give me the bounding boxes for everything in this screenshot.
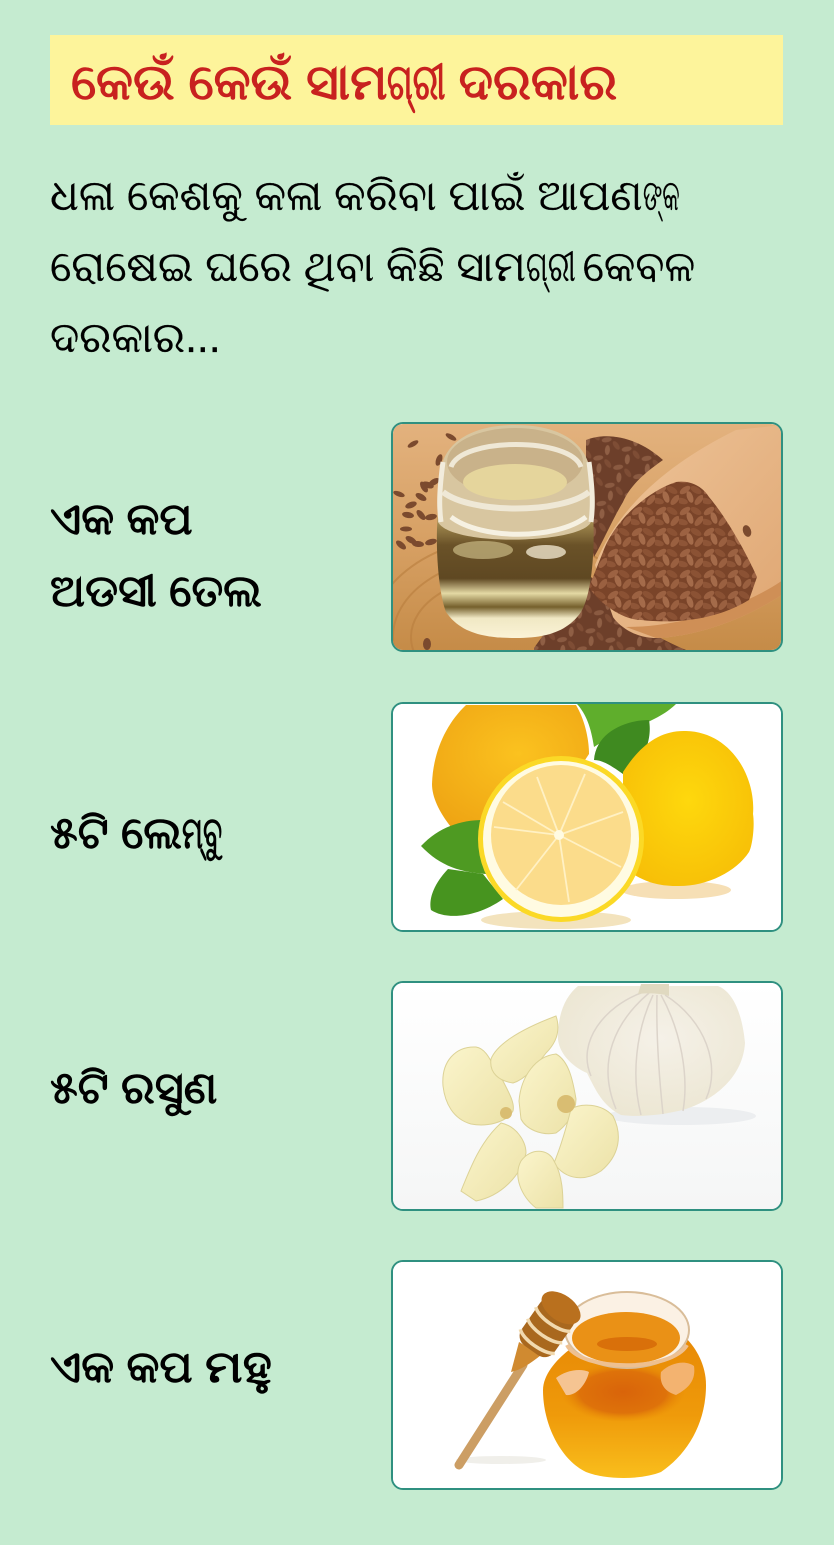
intro text: ଧଳା କେଶକୁ କଳା କରିବା ପାଇଁ ଆପଣ [50, 172, 643, 220]
loose seeds left [393, 432, 457, 650]
jar rim [565, 1292, 689, 1368]
right lemon [623, 731, 754, 886]
intro text: ରୋଷେଇ ଘରେ ଥିବା କିଛି ସାମ କେବଳ [50, 243, 695, 291]
label: lemons: ୫ଟି ଲେ [50, 809, 182, 858]
label: flaxseed oil [50, 495, 262, 616]
lower seed pile [534, 577, 691, 652]
label: honey [50, 1343, 272, 1394]
intro text: ଙ୍କ [643, 172, 679, 220]
honey jar body [543, 1338, 706, 1478]
image: honey [391, 1260, 783, 1490]
spoon [595, 425, 783, 638]
bulb shadow [606, 1107, 756, 1125]
wood rings [371, 537, 651, 737]
top leaves [577, 704, 676, 747]
title: କେଉଁ କେଉଁ ସାମ ଦରକାର [71, 54, 617, 110]
back seed pile [586, 436, 663, 557]
image: garlic [391, 981, 783, 1211]
honey dipper [459, 1285, 587, 1465]
back lemon [432, 705, 589, 827]
image: lemons [391, 702, 783, 932]
title banner [50, 35, 783, 125]
left leaves [421, 820, 486, 874]
stick shadow [456, 1456, 546, 1464]
bulb stem [638, 984, 669, 996]
label: garlic: ୫ଟି ରସୁଣ [50, 1064, 217, 1113]
intro text [50, 172, 695, 362]
jar [437, 514, 594, 638]
title: ଗ୍ରୀ [387, 54, 446, 110]
label: honey: ଏକ କପ [50, 1343, 193, 1392]
bulb [558, 986, 745, 1116]
image: flaxseed oil [391, 422, 783, 652]
label: honey: ମହୁ [205, 1343, 272, 1392]
label: flaxseed oil: ଅଡସୀ ତେଲ [50, 567, 262, 616]
intro text: ଗ୍ରୀ [526, 243, 576, 291]
intro text: ଦରକାର... [50, 314, 221, 362]
spoon seeds [589, 482, 757, 621]
label: lemons: ମ୍ବୁ [182, 809, 222, 858]
cloves [443, 1016, 618, 1208]
shadows [621, 881, 731, 899]
label: flaxseed oil: ଏକ କପ [50, 495, 193, 544]
cut lemon [478, 756, 644, 922]
